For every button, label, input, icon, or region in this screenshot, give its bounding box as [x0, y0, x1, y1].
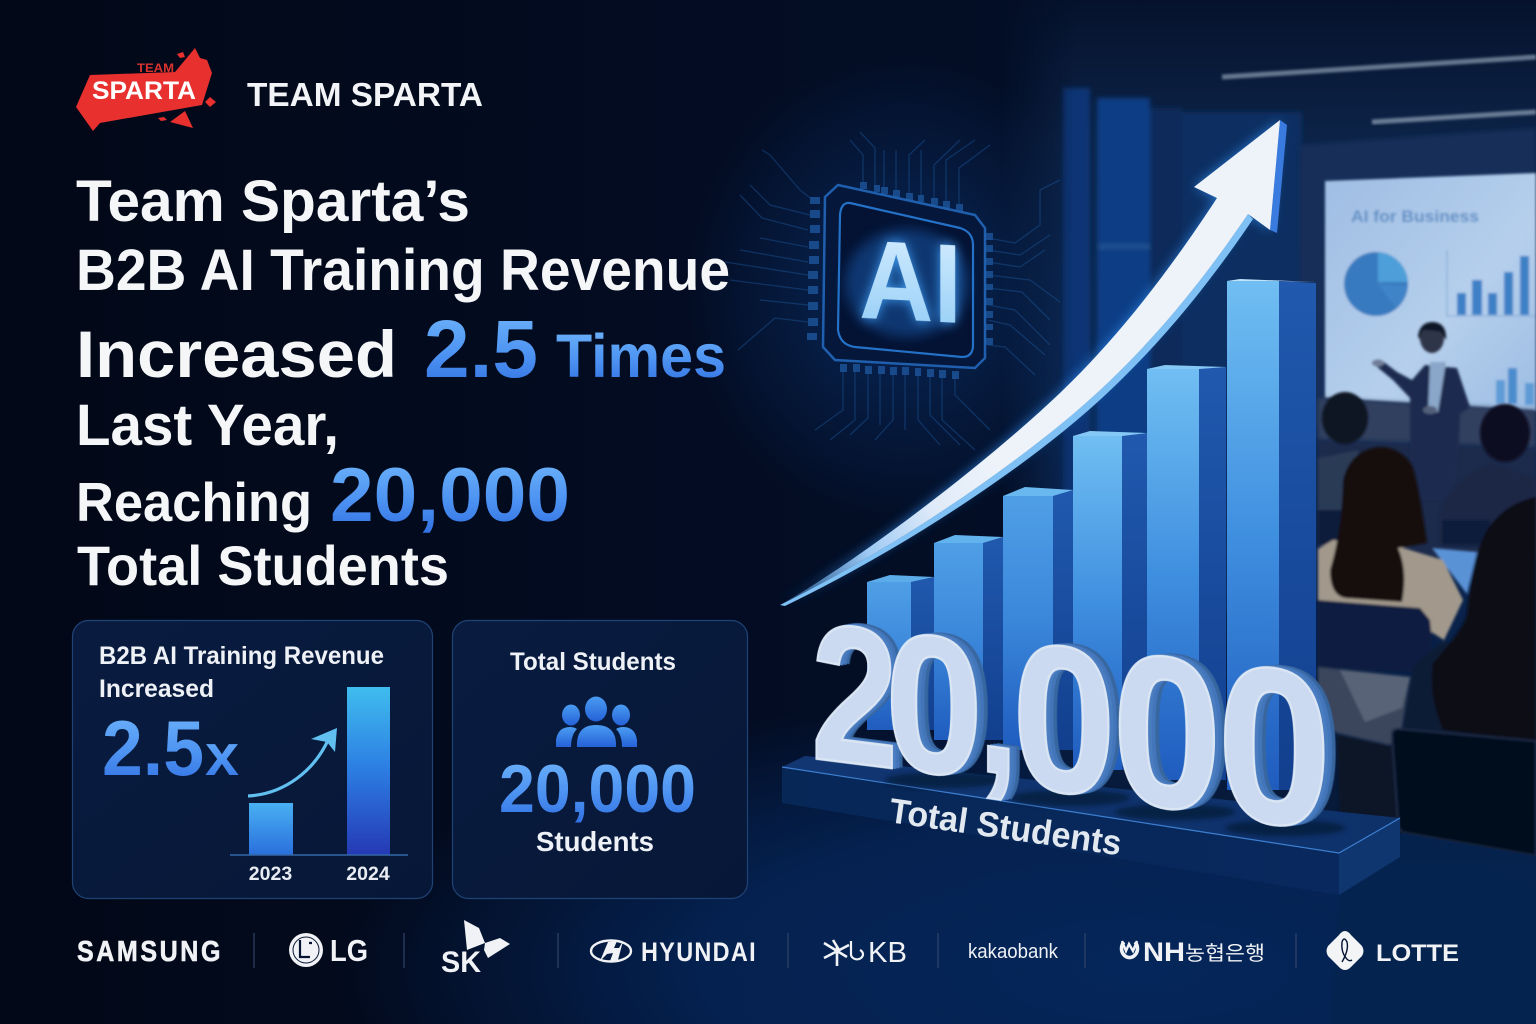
- big number 20,000: 0: [1217, 614, 1332, 878]
- card heading: Total Students: [510, 648, 676, 676]
- pins: [807, 182, 993, 379]
- woman centre: [1318, 447, 1463, 640]
- headline: 2.5: [424, 304, 538, 395]
- year labels: 2023: [249, 863, 292, 885]
- logo: Samsung: SAMSUNG: [77, 936, 223, 968]
- ceiling lights: [1222, 57, 1536, 122]
- revenue bars: [230, 687, 408, 855]
- platform label: Total Students: [887, 791, 1124, 863]
- client logos: [77, 920, 1459, 979]
- platform: [782, 756, 1400, 895]
- brand logo: SPARTA: [92, 77, 196, 105]
- back wall: [1300, 128, 1536, 430]
- bar 3: [1003, 487, 1073, 750]
- slide bar chart: [1447, 250, 1536, 405]
- logo: Lotte: [1326, 931, 1459, 970]
- chair row: [1318, 510, 1490, 545]
- headline: Last Year,: [76, 393, 339, 458]
- logo: KakaoBank: kakaobank: [968, 940, 1059, 963]
- logo: KB: [824, 937, 907, 969]
- student label: Students: [536, 826, 654, 857]
- panel: revenue card: [72, 620, 432, 898]
- bar 4: [1073, 431, 1147, 770]
- stage: [1318, 398, 1536, 448]
- headline: Reaching: [76, 471, 312, 533]
- left wall panels: [1063, 88, 1302, 612]
- logo: SK: [441, 920, 510, 979]
- floor: [1330, 833, 1536, 1024]
- headline: B2B AI Training Revenue: [76, 238, 730, 303]
- brand logo: TEAM: [137, 61, 174, 75]
- AI chip: [725, 132, 1060, 450]
- bar chart: [867, 279, 1316, 790]
- table: [1318, 667, 1410, 745]
- logo: NH: 농협은행: [1185, 942, 1265, 965]
- headline: [76, 169, 730, 597]
- icon: people: [556, 696, 637, 747]
- brand logo: [76, 48, 216, 131]
- logo: Hyundai: HYUNDAI: [641, 937, 757, 967]
- big number 20,000: [811, 581, 1332, 878]
- bar 5: [1147, 365, 1226, 780]
- chair back: [1392, 729, 1536, 856]
- multiplier: x: [205, 723, 239, 788]
- card heading: [99, 642, 384, 703]
- contact shadows: [885, 772, 1345, 836]
- big number 20,000: ,: [978, 617, 1018, 812]
- big number 20,000: 0: [1012, 597, 1116, 844]
- projection screen: [1325, 173, 1536, 411]
- year labels: 2024: [346, 863, 390, 885]
- attendee right: [1442, 402, 1536, 528]
- headline: Total Students: [77, 534, 449, 597]
- attendee left: [1318, 392, 1368, 510]
- woman right: [1403, 497, 1536, 745]
- logo: Lotte: LOTTE: [1376, 940, 1459, 967]
- logo: NH: NH: [1143, 937, 1185, 967]
- growth arrow: [780, 120, 1287, 606]
- logo: NH: [1122, 937, 1265, 967]
- logo: LG: LG: [330, 933, 368, 968]
- AI letters: AI: [859, 217, 962, 347]
- bar 2: [934, 535, 1003, 740]
- AI glow: [845, 229, 969, 337]
- year labels: [249, 863, 390, 885]
- logo: Hyundai: [591, 937, 757, 967]
- brand name: TEAM SPARTA: [247, 77, 483, 114]
- headline: Team Sparta’s: [76, 169, 470, 234]
- logo: LG: [289, 933, 368, 968]
- classroom scene: [1000, 0, 1536, 862]
- logo: KB: KB: [868, 937, 907, 969]
- laptop: [1432, 548, 1477, 594]
- big number 20,000: 0: [1112, 604, 1222, 860]
- chip inner: [838, 203, 973, 357]
- chip body: [823, 185, 985, 368]
- big number 20,000: 2: [811, 581, 898, 811]
- bar 1: [867, 575, 934, 730]
- headline: Increased: [76, 317, 397, 391]
- headline: 20,000: [330, 453, 570, 538]
- circuit traces: [725, 132, 1060, 450]
- logo: SK: SK: [441, 946, 481, 979]
- panel: students card: [452, 620, 748, 898]
- headline: Times: [556, 322, 726, 390]
- pie chart: [1344, 252, 1408, 316]
- trend arrow: [248, 728, 337, 796]
- card heading: Increased: [99, 675, 214, 703]
- presenter: [1370, 320, 1472, 444]
- card heading: B2B AI Training Revenue: [99, 642, 384, 670]
- student count: 20,000: [499, 751, 696, 827]
- big number 20,000: 0: [885, 589, 983, 821]
- projection screen: AI for Business: [1351, 207, 1479, 226]
- audience: [1318, 392, 1536, 856]
- chair: [1318, 600, 1432, 673]
- multiplier: 2.5: [102, 704, 204, 792]
- bar 6: [1227, 279, 1316, 790]
